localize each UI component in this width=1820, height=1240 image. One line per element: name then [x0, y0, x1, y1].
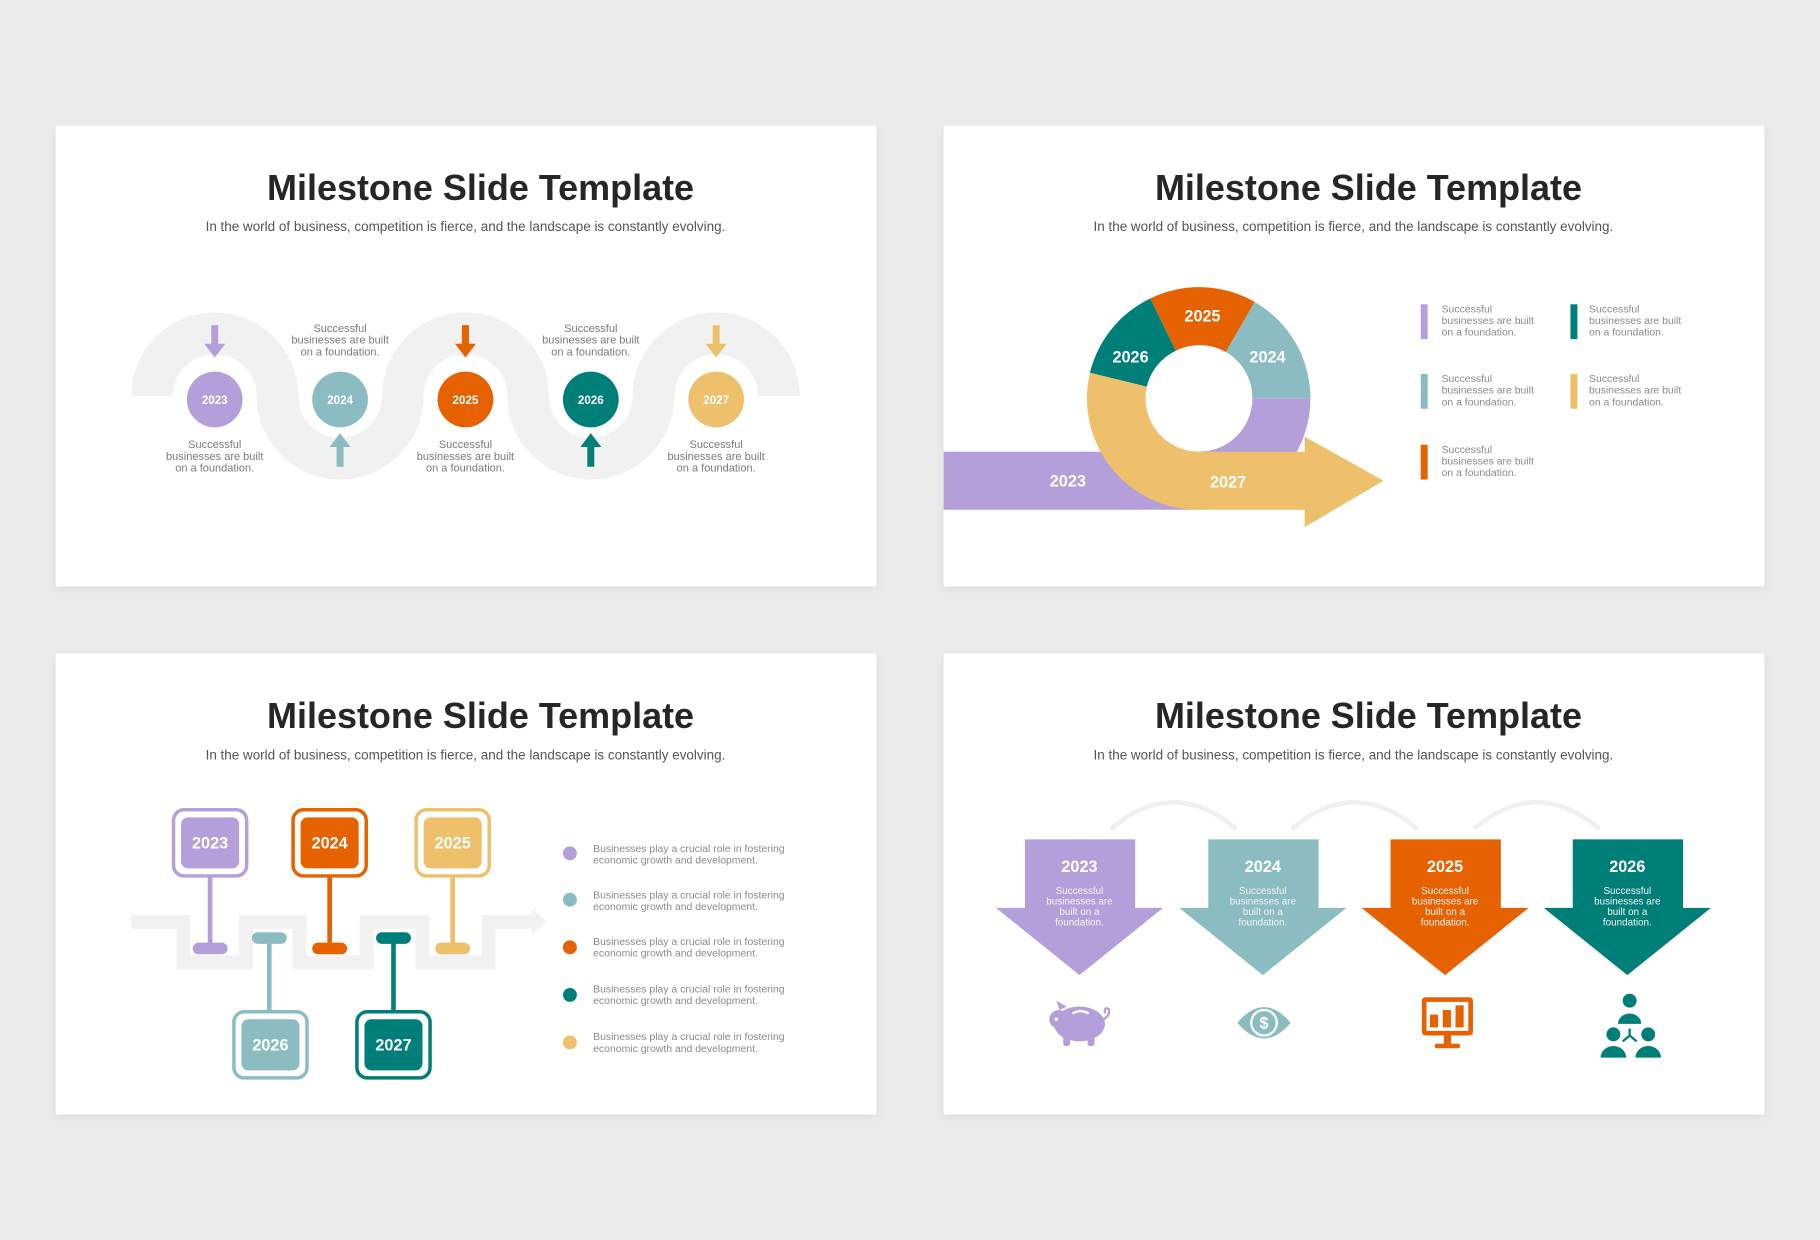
- milestone 2027: [667, 325, 765, 474]
- legend: economic growth and development.: [593, 902, 758, 913]
- legend: Businesses play a crucial role in fostering: [593, 1032, 785, 1043]
- legend: businesses are built: [1589, 316, 1681, 327]
- milestone 2027: 2027: [703, 394, 729, 407]
- milestone 2026: 2026: [252, 1037, 289, 1055]
- milestone 2026: 2026: [578, 394, 604, 407]
- panel: stepped timeline: [56, 654, 876, 1114]
- legend: [1421, 304, 1681, 480]
- milestone 2023: [166, 325, 263, 474]
- legend: Successful: [1589, 374, 1640, 385]
- legend: on a foundation.: [1589, 328, 1664, 339]
- legend: economic growth and development.: [593, 996, 758, 1007]
- arrow 2023: 2023: [1061, 858, 1098, 876]
- arrow 2024: businesses are: [1230, 896, 1297, 907]
- milestone 2026: on a foundation.: [551, 346, 630, 358]
- legend: businesses are built: [1442, 456, 1534, 467]
- arrow 2026: 2026: [1609, 858, 1645, 876]
- arrow 2024: 2024: [1245, 858, 1281, 876]
- arrow 2023: built on a: [1059, 907, 1100, 918]
- legend: economic growth and development.: [593, 856, 758, 867]
- legend: on a foundation.: [1442, 397, 1516, 408]
- legend: on a foundation.: [1442, 328, 1516, 339]
- milestone 2023: 2023: [202, 394, 228, 407]
- subtitle: In the world of business, competition is fierce, and the landscape is constantly evolving.: [206, 747, 725, 762]
- arrow 2023: foundation.: [1055, 917, 1104, 928]
- arrow 2024: [1179, 839, 1346, 975]
- milestone 2024: 2024: [312, 835, 348, 853]
- subtitle: In the world of business, competition is fierce, and the landscape is constantly evolving.: [206, 219, 725, 234]
- legend: Businesses play a crucial role in fostering: [593, 891, 785, 902]
- legend: on a foundation.: [1589, 397, 1664, 408]
- arrow 2026: built on a: [1607, 907, 1648, 918]
- milestone 2027: [357, 932, 430, 1078]
- donut chart with arrow: 2024: [1249, 348, 1286, 366]
- milestone 2027: Successful: [690, 439, 743, 451]
- legend: Businesses play a crucial role in fostering: [593, 985, 785, 996]
- arrow 2026: Successful: [1603, 886, 1651, 897]
- arrow 2025: Successful: [1421, 886, 1469, 897]
- panel: wave timeline: [56, 126, 876, 586]
- connector arcs: [1111, 802, 1599, 829]
- milestone 2023: 2023: [192, 835, 228, 853]
- arrow 2024: foundation.: [1238, 917, 1287, 928]
- arrow 2025: foundation.: [1421, 917, 1469, 928]
- arrow 2025: 2025: [1427, 858, 1463, 876]
- milestone 2023: businesses are built: [166, 451, 263, 463]
- donut chart with arrow: 2023: [1050, 473, 1086, 491]
- icon: eye with dollar: [1237, 1007, 1291, 1038]
- legend: Businesses play a crucial role in fostering: [593, 937, 785, 948]
- arrow 2026: foundation.: [1603, 917, 1652, 928]
- milestone 2026: businesses are built: [542, 335, 639, 347]
- arrow 2026: [1544, 839, 1711, 975]
- legend: Successful: [1442, 445, 1492, 456]
- legend: Businesses play a crucial role in fostering: [593, 844, 785, 855]
- legend: [563, 844, 785, 1055]
- milestone 2025: 2025: [453, 394, 479, 407]
- milestone 2027: 2027: [375, 1037, 412, 1055]
- arrow 2025: businesses are: [1412, 896, 1479, 907]
- wave path: [152, 333, 779, 459]
- arrow 2025: built on a: [1425, 907, 1466, 918]
- icon: people network: [1601, 994, 1661, 1058]
- arrow 2023: businesses are: [1046, 896, 1113, 907]
- milestone 2025: [416, 810, 489, 954]
- panel: donut arrow: [944, 126, 1764, 586]
- milestone 2024: [293, 810, 366, 954]
- milestone 2025: on a foundation.: [426, 462, 505, 474]
- subtitle: In the world of business, competition is fierce, and the landscape is constantly evolving.: [1094, 747, 1613, 762]
- arrow 2023: [996, 839, 1163, 975]
- title: Milestone Slide Template: [1155, 167, 1582, 208]
- milestone 2026: [542, 323, 639, 467]
- legend: businesses are built: [1442, 316, 1534, 327]
- milestone 2023: on a foundation.: [175, 462, 254, 474]
- panel: down arrows with icons: [944, 654, 1764, 1114]
- icon: eye with dollar: $: [1259, 1015, 1269, 1033]
- milestone 2025: businesses are built: [417, 451, 514, 463]
- milestone 2026: [234, 932, 307, 1078]
- legend: businesses are built: [1442, 386, 1534, 397]
- legend: Successful: [1442, 304, 1492, 315]
- donut chart with arrow: 2027: [1210, 474, 1246, 492]
- legend: on a foundation.: [1442, 468, 1516, 479]
- milestone 2026: Successful: [564, 323, 617, 335]
- arrow 2023: Successful: [1056, 886, 1103, 897]
- milestone 2024: on a foundation.: [301, 346, 380, 358]
- title: Milestone Slide Template: [1155, 695, 1582, 736]
- milestone 2024: 2024: [327, 394, 354, 407]
- arrow 2024: built on a: [1243, 907, 1283, 918]
- milestone 2027: on a foundation.: [677, 462, 756, 474]
- milestone 2025: Successful: [439, 439, 492, 451]
- legend: economic growth and development.: [593, 949, 758, 960]
- donut chart with arrow: 2025: [1184, 308, 1221, 326]
- legend: Successful: [1442, 374, 1492, 385]
- milestone 2025: [417, 325, 514, 474]
- legend: Successful: [1589, 304, 1640, 315]
- milestone 2023: [174, 810, 247, 954]
- milestone 2025: 2025: [435, 835, 471, 853]
- milestone 2024: Successful: [313, 323, 367, 335]
- stepped path: [131, 922, 534, 962]
- subtitle: In the world of business, competition is fierce, and the landscape is constantly evolving.: [1094, 219, 1613, 234]
- donut chart with arrow: [944, 287, 1384, 527]
- donut chart with arrow: 2026: [1112, 348, 1149, 366]
- arrow 2026: businesses are: [1594, 896, 1661, 907]
- milestone 2023: Successful: [188, 439, 241, 451]
- legend: economic growth and development.: [593, 1044, 758, 1055]
- arrow 2024: Successful: [1239, 886, 1287, 897]
- legend: businesses are built: [1589, 386, 1681, 397]
- milestone 2024: [291, 323, 389, 467]
- title: Milestone Slide Template: [267, 695, 694, 736]
- title: Milestone Slide Template: [267, 167, 694, 208]
- arrow 2025: [1362, 839, 1529, 975]
- icon: piggy bank: [1049, 1001, 1109, 1046]
- icon: monitor chart: [1422, 997, 1473, 1048]
- milestone 2024: businesses are built: [291, 335, 389, 347]
- milestone 2027: businesses are built: [667, 451, 765, 463]
